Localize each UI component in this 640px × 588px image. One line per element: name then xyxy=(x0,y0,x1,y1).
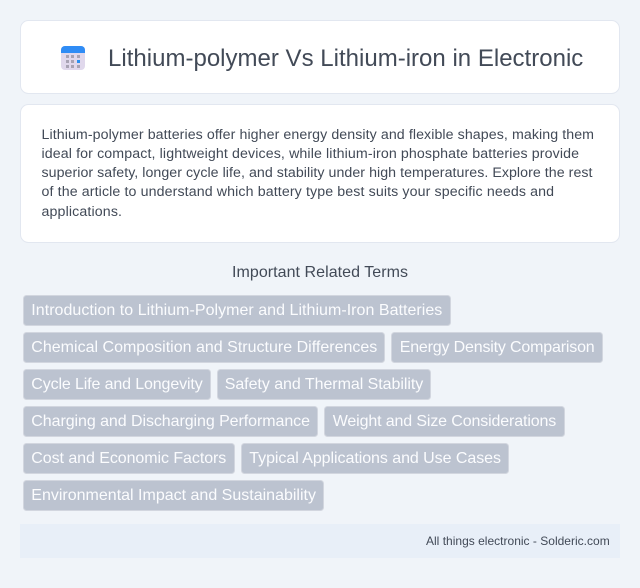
summary text: ideal for compact, lightweight devices, while lithium-iron phosphate batteries provide xyxy=(42,146,579,162)
tag: Cycle Life and Longevity xyxy=(31,376,203,393)
tag xyxy=(24,480,324,510)
tag xyxy=(218,370,430,400)
summary text: Lithium-polymer batteries offer higher energy density and flexible shapes, making them xyxy=(42,127,594,143)
tag xyxy=(392,332,602,362)
tag xyxy=(24,332,384,362)
tag: Weight and Size Considerations xyxy=(333,413,556,430)
tag xyxy=(24,406,318,436)
tag: Charging and Discharging Performance xyxy=(31,413,310,430)
summary text: superior safety, longer cycle life, and stability under high temperatures. Explore the rest xyxy=(42,165,593,181)
summary text xyxy=(42,127,594,220)
tag xyxy=(242,444,508,474)
footer text: All things electronic - Solderic.com xyxy=(426,534,610,548)
tag xyxy=(24,370,210,400)
footer xyxy=(20,524,620,558)
tag: Typical Applications and Use Cases xyxy=(249,450,501,467)
tag: Safety and Thermal Stability xyxy=(225,376,423,393)
title: Lithium-polymer Vs Lithium-iron in Electronic xyxy=(108,45,583,72)
panel: summary xyxy=(20,104,620,242)
tag: Introduction to Lithium-Polymer and Lithium-Iron Batteries xyxy=(31,302,442,319)
tag list xyxy=(24,296,602,510)
icon: calendar xyxy=(61,46,85,70)
tag xyxy=(24,444,234,474)
summary text: applications. xyxy=(42,204,122,220)
tag: Chemical Composition and Structure Differences xyxy=(31,339,377,356)
tag: Energy Density Comparison xyxy=(400,339,595,356)
tag xyxy=(324,406,564,436)
heading: related terms: Important Related Terms xyxy=(232,264,408,281)
summary text: of the article to understand which battery type best suits your specific needs and xyxy=(42,184,554,200)
panel: header xyxy=(20,20,620,94)
tag: Environmental Impact and Sustainability xyxy=(31,487,316,504)
tag xyxy=(24,296,450,326)
tag: Cost and Economic Factors xyxy=(31,450,226,467)
